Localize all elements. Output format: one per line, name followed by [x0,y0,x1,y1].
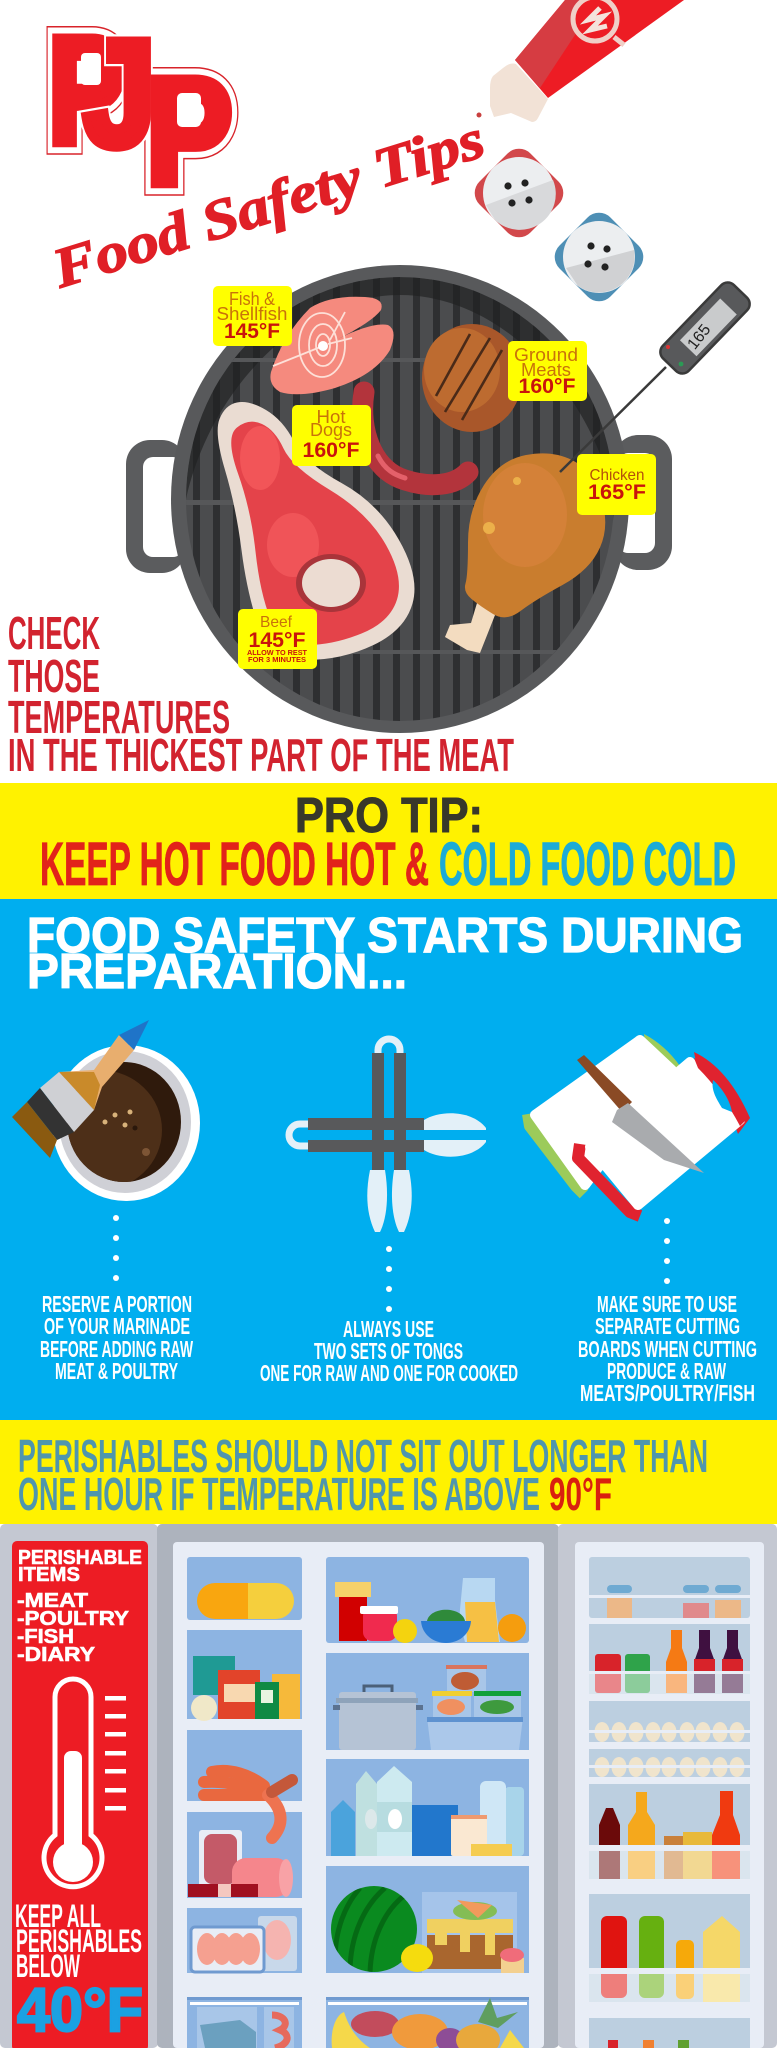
logo: PJP: P [49,7,125,175]
heading: food safety starts during preparation: PREPARATION... [27,945,407,999]
heading: check those temperatures: THOSE [8,650,100,702]
text: keep all perishables below 40F: 40°F [17,1976,143,2045]
food: beef steak [218,402,414,660]
door: jars [589,1585,750,1618]
food: jams, bowl, jug and orange [335,1578,526,1643]
label: chicken [577,454,656,515]
label: beef: FOR 3 MINUTES [248,657,306,664]
panel: perishables warning: 90°F [549,1468,612,1520]
food: pot and containers [333,1665,523,1750]
text: two sets of tongs [260,1316,518,1386]
food: chicken drumstick [445,453,605,653]
list: perishable items [17,1547,142,1666]
title: Food Safety Tips: Food Safety Tips [44,108,492,301]
door: bottles and carton [589,1916,750,2002]
text: two sets of tongs: ONE FOR RAW AND ONE FOR COOKED [260,1360,518,1386]
door: sauces [589,1791,750,1879]
fridge doors and interior [0,1524,777,2048]
icon: tongs [289,1039,486,1232]
text: reserve marinade [40,1291,193,1384]
door: drinks [589,1630,750,1694]
heading: check those temperatures [8,607,514,781]
label: hot dogs [292,405,371,466]
icon: thermometer [44,1679,126,1887]
label: ground meats: Meats [521,360,571,380]
text: reserve marinade: MEAT & POULTRY [55,1358,178,1384]
icon: marinade bowl and brush [12,1020,200,1201]
label: ground meats: Ground [514,345,578,365]
text: two sets of tongs: ALWAYS USE [343,1316,434,1342]
list: perishable items: -FISH [17,1626,74,1648]
food: hot dog [363,392,468,485]
logo: PJP [49,7,232,215]
door: eggs [589,1722,750,1777]
panel: pro tip [0,783,777,899]
icon: cutting boards and knife [528,1034,750,1216]
logo: PJP: P [49,7,125,175]
food: cheese [197,1583,294,1619]
label: beef: 145°F [248,629,306,652]
food: cans [191,1656,300,1721]
text: keep all perishables below 40F: PERISHABLES [16,1923,142,1959]
icon: blue pepper shaker [548,206,650,308]
door: bottle tops [608,2040,689,2048]
logo: PJP: J [84,9,155,177]
grill body [126,265,672,733]
label: chicken: Chicken [590,467,644,484]
shelves: middle column [326,1557,529,2048]
text: reserve marinade: RESERVE A PORTION [42,1291,192,1317]
food: fish and chicken trays [191,1916,297,1972]
logo: PJP: P [49,7,125,175]
icon: red salt shaker [468,142,570,244]
list: perishable items: -DIARY [17,1644,96,1666]
logo: PJP: P [147,47,232,215]
label: fish & shellfish: Shellfish [216,304,288,324]
heading: food safety starts during preparation: FOOD SAFETY STARTS DURING [27,909,743,963]
panel: preparation [0,899,777,1420]
label: hot dogs: 160°F [302,439,360,462]
heading: check those temperatures: TEMPERATURES [8,691,230,743]
list: perishable items: -MEAT [17,1590,88,1612]
label: chicken: 165°F [588,481,646,504]
food: dairy [331,1766,524,1856]
label: hot dogs: Dogs [310,420,352,440]
logo: PJP: J [84,9,155,177]
food: watermelon and cake [331,1886,524,1976]
logo: PJP: P [147,47,232,215]
panel: perishable items and thermometer [12,1541,148,2048]
logo: PJP: P [147,47,232,215]
icon: sauce bottle [476,0,684,122]
text: keep all perishables below 40F: BELOW [16,1948,80,1984]
text: reserve marinade: OF YOUR MARINADE [44,1313,190,1339]
label: fish & shellfish [213,286,292,346]
text: separate cutting boards [578,1291,757,1406]
thermometer probe: 165 [685,321,714,353]
text: reserve marinade: BEFORE ADDING RAW [40,1336,193,1362]
shelves: door [589,1557,750,2048]
thermometer probe [560,279,753,472]
dotted connectors [113,1215,670,1312]
text: two sets of tongs: TWO SETS OF TONGS [314,1338,463,1364]
label: beef [238,609,317,669]
label: beef: ALLOW TO REST [247,650,308,657]
list: perishable items: PERISHABLE [18,1547,142,1569]
text: keep all perishables below 40F: KEEP ALL [15,1898,101,1934]
label: ground meats: 160°F [518,375,576,398]
food: grilled patty [422,324,522,432]
label: fish & shellfish: 145°F [224,320,280,343]
panel: pro tip: PRO TIP: [295,789,483,843]
heading: check those temperatures: CHECK [8,607,100,659]
list: perishable items: ITEMS [18,1564,80,1586]
text: keep all perishables below 40F [15,1898,143,2045]
food: salmon steak [270,297,394,394]
panel: fridge [0,1524,777,2048]
list: perishable items: -POULTRY [17,1608,130,1630]
panel: perishables warning [0,1420,777,1524]
label: hot dogs: Hot [316,407,346,427]
food: sausages [204,1771,292,1838]
food: deli meats [188,1830,293,1897]
freezer: fish and shrimp [187,1997,302,2048]
label: fish & shellfish: Fish & [229,289,275,309]
food: fruit crate [326,1997,529,2048]
panel: pro tip: KEEP HOT FOOD HOT & [40,830,429,898]
heading: food safety starts during preparation [27,909,743,999]
chart: grill with foods and temperature labels [126,265,753,733]
shelves: left column [187,1557,302,2048]
label: beef: Beef [260,614,293,631]
label: ground meats [508,341,587,401]
